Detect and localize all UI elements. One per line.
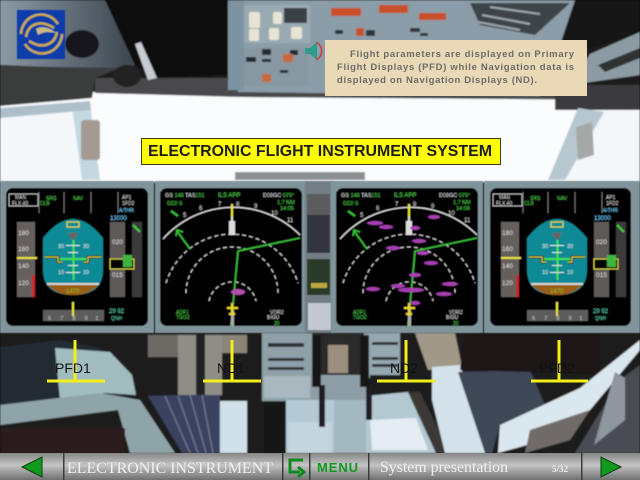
FMA header: [493, 192, 618, 322]
FMA header: SRS: [530, 196, 541, 202]
speed tape: [501, 222, 519, 297]
route: [348, 211, 477, 326]
heading and data text: D08GC 079°: [439, 193, 470, 199]
label: PFD2: [531, 340, 588, 381]
compass arc: 9: [254, 204, 258, 210]
compass arc: 9: [431, 204, 435, 210]
attitude indicator: 10: [83, 270, 89, 276]
return icon: [290, 460, 304, 477]
panel: ND2: ADF1: [353, 310, 366, 316]
icon: speaker: [305, 42, 322, 60]
heading tape: [43, 302, 104, 322]
speed tape: [17, 222, 35, 297]
callout: description note: [325, 40, 587, 96]
FMA header: A/THR: [603, 208, 618, 214]
altitude tape: 020: [112, 239, 123, 246]
panel: ND2: TGO2: [353, 315, 367, 321]
altitude tape: 015: [112, 272, 123, 279]
menu button: MENU: [317, 460, 358, 475]
speed tape: 180: [502, 230, 513, 237]
FMA header: AP1: [122, 195, 132, 201]
speed tape: 160: [502, 246, 513, 253]
next arrow: [601, 457, 621, 477]
centre column behind displays: [304, 181, 334, 333]
speed tape: 160: [18, 246, 29, 253]
attitude indicator: [527, 219, 587, 295]
compass arc: 11: [464, 218, 471, 224]
left upper wall: [0, 0, 135, 70]
FMA header: MAN: [499, 195, 510, 201]
title: ELECTRONIC FLIGHT INSTRUMENT SYSTEM: [148, 143, 492, 160]
panel: ND2: VOR2: [449, 310, 463, 316]
compass arc: 10: [448, 211, 455, 217]
panel: ND1: [155, 181, 305, 333]
altitude tape: 13000: [110, 216, 127, 222]
heading and data text: 1.7 NM: [453, 200, 471, 206]
heading and data text: 022/ 6: [167, 201, 182, 207]
FMA header: SRS: [46, 196, 57, 202]
FMA header: 29 92: [109, 309, 125, 315]
aircraft symbol: [227, 303, 238, 315]
speed tape: 120: [502, 280, 513, 287]
heading and data text: 1.7 NM: [277, 200, 295, 206]
panel: ND1: VOR2: [270, 310, 284, 316]
label: PFD2: PFD2: [539, 360, 575, 376]
attitude indicator: 30: [83, 244, 89, 250]
compass arc: 5: [360, 213, 364, 219]
panel: ND2: 20: [453, 321, 459, 327]
section title: ELECTRONIC INSTRUMENT: [67, 460, 273, 477]
attitude indicator: 10: [542, 270, 548, 276]
compass arc: 7: [395, 202, 399, 208]
FMA header: [9, 192, 134, 322]
speed tape: 140: [502, 263, 513, 270]
windshield: [0, 92, 640, 182]
panel: ND2: BIGU: [446, 315, 459, 321]
FMA header: NAV: [73, 196, 84, 202]
compass arc: [340, 202, 477, 239]
altitude tape: 015: [596, 272, 607, 279]
page number: 5/32: [552, 464, 569, 474]
panel: ND1: TGO2: [176, 315, 190, 321]
heading and data text: D08GC 079°: [263, 193, 294, 199]
heading and data text: 14:08: [456, 206, 470, 212]
compass arc: 10: [271, 211, 278, 217]
heading and data text: 14:05: [280, 206, 294, 212]
attitude indicator: 10: [58, 270, 64, 276]
panel: ND1: ADF1: [176, 310, 189, 316]
FMA header: 1FD2: [606, 201, 618, 207]
speed tape: 120: [18, 280, 29, 287]
compass arc: 6: [376, 206, 380, 212]
panel: ND1: BIGU: [267, 315, 280, 321]
heading tape: [527, 302, 588, 322]
speed tape: 140: [18, 263, 29, 270]
callout: description note: Flight Displays (PFD) while Navigation data is: [337, 62, 574, 73]
panel: PFD1: [0, 181, 154, 333]
compass arc: 5: [183, 213, 187, 219]
FMA header: QNH: [111, 316, 122, 322]
label: ND1: ND1: [217, 360, 245, 376]
mirror clip right: [576, 122, 594, 160]
attitude indicator: 30: [542, 244, 548, 250]
attitude indicator: 30: [567, 244, 573, 250]
FMA header: A/THR: [119, 208, 134, 214]
label: PFD1: PFD1: [55, 360, 91, 376]
right seat: [415, 333, 640, 453]
FMA header: FLX 40: [496, 201, 512, 207]
aircraft symbol: [404, 303, 415, 315]
navigation bar: [0, 453, 640, 480]
FMA header: AP1: [606, 195, 616, 201]
altitude tape: 13000: [594, 216, 611, 222]
heading and data text: [165, 193, 295, 212]
overhead panel: [228, 0, 640, 96]
top black recess: [105, 0, 232, 78]
altitude tape: [110, 216, 142, 297]
attitude indicator: 30: [58, 244, 64, 250]
FMA header: NAV: [557, 196, 568, 202]
FMA header: CLB: [524, 201, 534, 207]
route: [171, 211, 300, 326]
heading and data text: GS 148 TAS151: [165, 193, 205, 199]
callout: description note: displayed on Navigation Displays (ND).: [337, 75, 537, 86]
range rings: [343, 234, 475, 301]
altitude tape: [594, 216, 626, 297]
FMA header: MAN: [15, 195, 26, 201]
title: [142, 138, 500, 164]
FMA header: CLB: [40, 201, 50, 207]
altitude tape: 020: [596, 239, 607, 246]
centre pedestal: [262, 333, 450, 453]
range rings: [166, 234, 298, 301]
back arrow: [22, 457, 42, 477]
label: ND1: [203, 340, 261, 381]
label: ND2: [377, 340, 435, 381]
weather returns: [366, 215, 458, 305]
compass arc: 8: [236, 202, 240, 208]
compass arc: [163, 202, 300, 239]
mirror clip left: [81, 120, 100, 160]
callout: description note: Flight parameters are displayed on Primary: [350, 49, 575, 60]
panel: PFD2: [484, 181, 640, 333]
speed tape: 180: [18, 230, 29, 237]
panel: ND2: [331, 181, 483, 333]
FMA header: 29 92: [593, 309, 609, 315]
left seat: [0, 335, 247, 453]
FMA header: QNH: [595, 316, 606, 322]
heading and data text: ILS APP: [394, 193, 416, 199]
compass arc: 6: [199, 206, 203, 212]
compass arc: 8: [413, 202, 417, 208]
subsection title: System presentation: [380, 459, 508, 476]
heading and data text: 022/ 6: [343, 201, 358, 207]
heading tape: 6 7 8 9 1: [48, 316, 98, 322]
attitude indicator: 10: [567, 270, 573, 276]
attitude indicator: [43, 219, 103, 295]
label: ND2: ND2: [390, 360, 418, 376]
attitude indicator: 1470: [550, 289, 564, 295]
panel: ND1: 20: [274, 321, 280, 327]
label: PFD1: [47, 340, 105, 381]
heading and data text: ILS APP: [218, 193, 240, 199]
heading and data text: GS 148 TAS151: [341, 193, 381, 199]
heading tape: 6 7 8 9 1: [532, 316, 582, 322]
compass arc: 7: [218, 202, 222, 208]
heading and data text: [341, 193, 471, 212]
logo: [17, 10, 65, 59]
compass arc: 11: [287, 218, 294, 224]
lower cockpit base: [0, 333, 640, 453]
FMA header: FLX 40: [12, 201, 28, 207]
attitude indicator: 1470: [66, 289, 80, 295]
FMA header: 1FD2: [122, 201, 134, 207]
